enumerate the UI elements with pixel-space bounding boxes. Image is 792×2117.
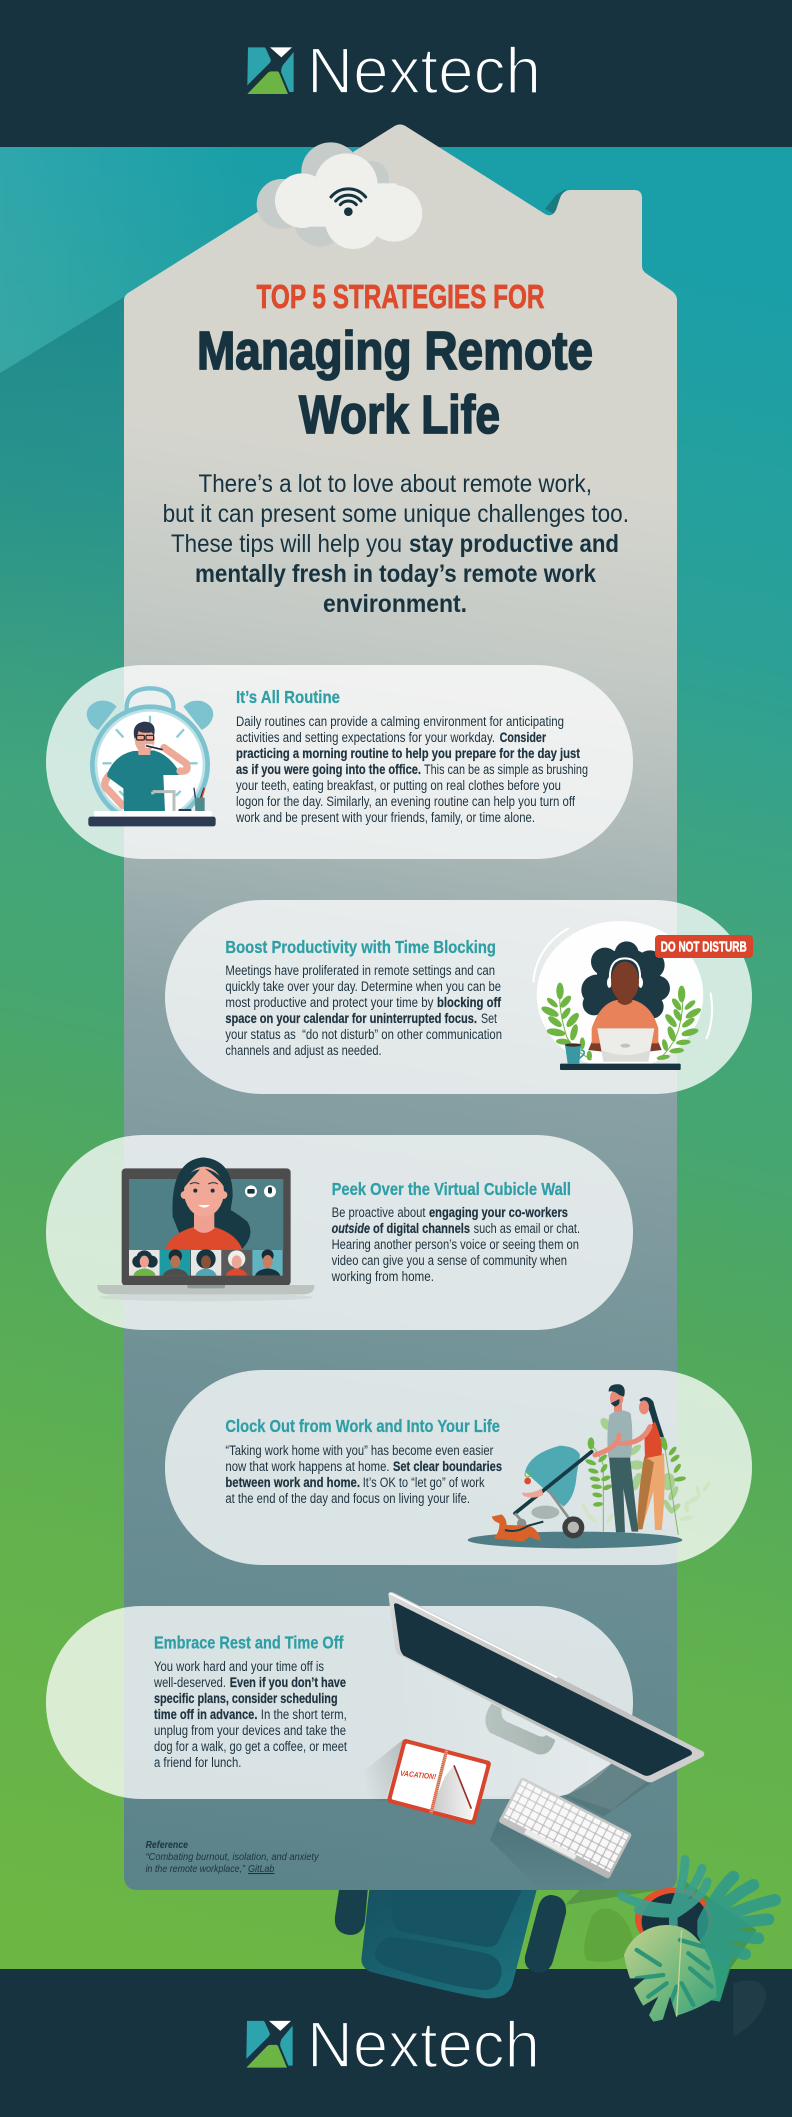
- wordmark: bottom: Nextech: [307, 2008, 540, 2081]
- plant: [584, 1859, 775, 2037]
- bottom band: [0, 1969, 792, 2117]
- body text: engaging your co-workers: [429, 1205, 568, 1220]
- logo: bottom: [246, 2008, 540, 2081]
- keyboard: [498, 1777, 632, 1879]
- eyebrow heading: TOP 5 STRATEGIES FOR: [256, 278, 545, 315]
- top band: [0, 0, 792, 147]
- pill background: [46, 1135, 633, 1330]
- body text: a friend for lunch.: [154, 1755, 241, 1770]
- leaf: top: [622, 1859, 707, 1930]
- heading: Embrace Rest and Time Off: [154, 1632, 344, 1652]
- logo icon: bottom: [246, 2021, 293, 2068]
- body text: [331, 1205, 580, 1284]
- body text: activities and setting expectations for your workday.: [236, 730, 495, 745]
- body text: your status as “do not disturb” on other communication: [225, 1027, 502, 1042]
- body text: Meetings have proliferated in remote settings and can: [225, 963, 495, 978]
- panel: Boost Productivity: [165, 900, 753, 1094]
- body text: specific plans, consider scheduling: [154, 1691, 338, 1706]
- body text: logon for the day. Similarly, an evening routine can help you turn off: [236, 794, 575, 809]
- body text: your teeth, eating breakfast, or putting on real clothes before you: [236, 778, 561, 793]
- panel: Clock Out from Work: [165, 1370, 752, 1565]
- wordmark: top: Nextech: [307, 34, 541, 107]
- body text: at the end of the day and focus on living your life.: [225, 1491, 470, 1506]
- office chair: [335, 1883, 566, 1998]
- body text: In the short term,: [261, 1707, 347, 1722]
- intro text: These tips will help you: [171, 530, 402, 558]
- do not disturb badge: DO NOT DISTURB: [661, 939, 747, 956]
- notebook shadow: [363, 1739, 403, 1802]
- body text: well-deserved.: [153, 1675, 226, 1690]
- notebook: [386, 1738, 492, 1825]
- house panel: [124, 124, 677, 1890]
- participant thumbnails: [129, 1249, 283, 1276]
- body text: time off in advance.: [154, 1707, 257, 1722]
- illustration: woman at laptop in globe: [533, 921, 712, 1070]
- pill background: [165, 1370, 752, 1565]
- monitor stand: [485, 1703, 555, 1755]
- wifi icon: [331, 189, 366, 216]
- heading: Clock Out from Work and Into Your Life: [225, 1416, 500, 1436]
- light wash above the house shadow: [0, 147, 240, 373]
- body text: [153, 1659, 347, 1770]
- body text: Even if you don’t have: [230, 1675, 346, 1690]
- body text: of digital channels: [373, 1221, 470, 1236]
- leaf: upper teal: [703, 1877, 775, 1958]
- body text: outside: [332, 1221, 370, 1236]
- logo: top: [247, 34, 541, 107]
- notebook: VACATION!: [400, 1769, 437, 1781]
- logo icon: top: [247, 47, 294, 94]
- body text: Daily routines can provide a calming environment for anticipating: [236, 714, 564, 729]
- body text: [225, 1443, 502, 1506]
- panel: Peek Over the Virtual Cubicle Wall: [46, 1135, 633, 1330]
- body text: between work and home.: [225, 1475, 360, 1490]
- leaf: front monstera: [624, 1925, 717, 2023]
- heading: Boost Productivity with Time Blocking: [225, 937, 496, 957]
- body text: Consider: [500, 730, 547, 745]
- intro text: but it can present some unique challenges too.: [163, 500, 629, 528]
- body text: blocking off: [437, 995, 501, 1010]
- plant shadows: [584, 1908, 635, 1962]
- keyboard shadow: [490, 1822, 608, 1893]
- body text: quickly take over your day. Determine when you can be: [225, 979, 501, 994]
- heading: Peek Over the Virtual Cubicle Wall: [332, 1179, 571, 1199]
- body text: space on your calendar for uninterrupted focus.: [225, 1011, 477, 1026]
- body text: video can give you a sense of community when: [332, 1253, 567, 1268]
- body text: dog for a walk, go get a coffee, or meet: [154, 1739, 347, 1754]
- body text: Set: [481, 1011, 497, 1026]
- pill background: [46, 1606, 633, 1799]
- heading: It’s All Routine: [236, 687, 340, 707]
- plant pot: [635, 1888, 712, 1949]
- main heading: Managing Remote: [197, 321, 593, 381]
- keyboard shadow on the background: [565, 1890, 660, 1905]
- body text: now that work happens at home.: [225, 1459, 390, 1474]
- illustration: family with stroller and dog: [468, 1384, 712, 1548]
- body text: Set clear boundaries: [393, 1459, 502, 1474]
- body text: “Taking work home with you” has become even easier: [225, 1443, 494, 1458]
- illustration: desk with monitor, notebook and keyboard: [363, 1592, 704, 1893]
- main heading: Work Life: [299, 385, 500, 445]
- teal leaf mass under front leaf: [687, 1937, 731, 2002]
- do not disturb badge: [655, 935, 753, 958]
- long house shadow: [0, 297, 124, 780]
- reference note: [146, 1839, 319, 1875]
- panel: It's All Routine: [46, 665, 633, 859]
- body text: as if you were going into the office.: [236, 762, 421, 777]
- title block: [197, 278, 593, 445]
- pill background: [46, 665, 633, 859]
- body text: Hearing another person’s voice or seeing them on: [332, 1237, 579, 1252]
- pill background: [165, 900, 752, 1094]
- body text: You work hard and your time off is: [154, 1659, 324, 1674]
- intro text: stay productive and: [409, 530, 619, 558]
- body text: practicing a morning routine to help you prepare for the day just: [236, 746, 580, 761]
- body text: [225, 963, 502, 1058]
- chimney shadow: [545, 189, 566, 216]
- body text: It’s OK to “let go” of work: [363, 1475, 485, 1490]
- illustration: man brushing teeth in alarm clock: [87, 688, 216, 826]
- intro text: [163, 470, 629, 618]
- body text: most productive and protect your time by: [225, 995, 434, 1010]
- reference note: “Combating burnout, isolation, and anxiety: [146, 1851, 319, 1863]
- reference note: GitLab: [248, 1863, 275, 1875]
- body text: Be proactive about: [332, 1205, 426, 1220]
- panel: Embrace Rest and Time Off: [46, 1606, 633, 1799]
- main heading: [197, 321, 593, 445]
- illustration: video call on laptop: [97, 1157, 314, 1301]
- intro text: environment.: [323, 590, 467, 618]
- cloud with wifi icon: [257, 142, 422, 249]
- body text: such as email or chat.: [474, 1221, 580, 1236]
- body text: [235, 714, 588, 825]
- intro text: There’s a lot to love about remote work,: [198, 470, 592, 498]
- monitor shadows: [390, 1652, 648, 1810]
- body text: work and be present with your friends, family, or time alone.: [235, 810, 535, 825]
- body text: channels and adjust as needed.: [225, 1043, 382, 1058]
- body text: working from home.: [331, 1269, 434, 1284]
- monitor: [388, 1592, 704, 1782]
- intro text: mentally fresh in today’s remote work: [195, 560, 596, 588]
- reference note: in the remote workplace,”: [146, 1863, 245, 1875]
- reference note: Reference: [146, 1839, 188, 1851]
- body text: This can be as simple as brushing: [424, 762, 588, 777]
- body text: unplug from your devices and take the: [154, 1723, 346, 1738]
